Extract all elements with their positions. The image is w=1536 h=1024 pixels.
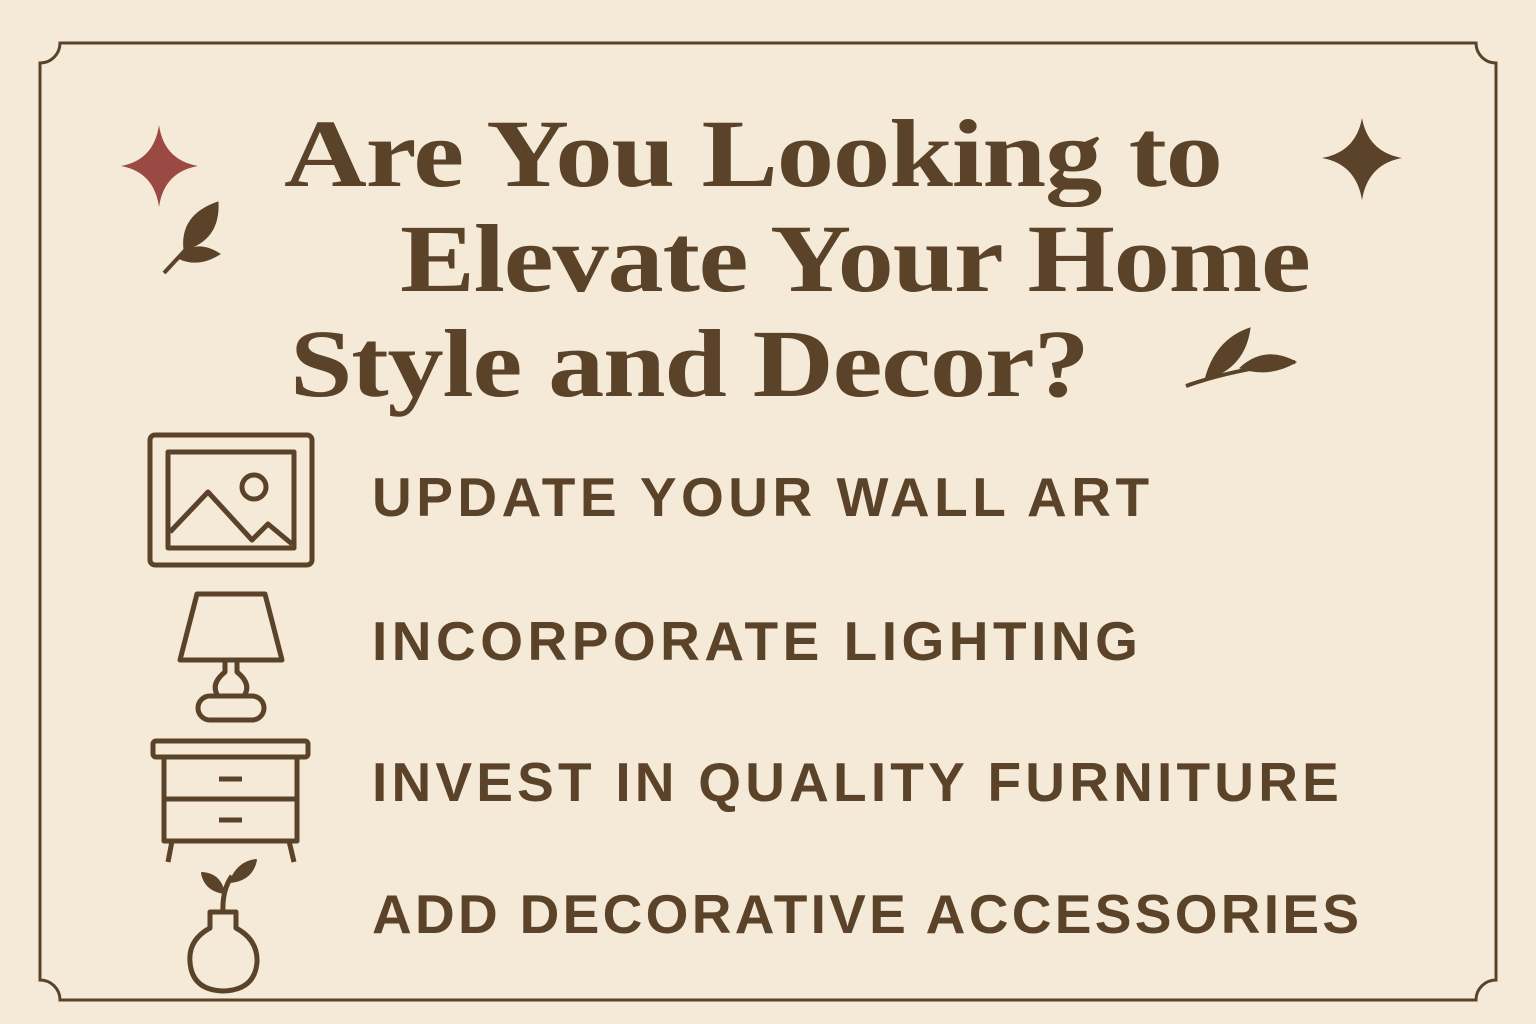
list item 2: INCORPORATE LIGHTING	[372, 610, 1142, 672]
list item 1: UPDATE YOUR WALL ART	[372, 466, 1154, 528]
list item 4: ADD DECORATIVE ACCESSORIES	[372, 883, 1362, 945]
title: Elevate Your Home	[400, 205, 1310, 312]
list item 3: INVEST IN QUALITY FURNITURE	[372, 751, 1343, 813]
title: Style and Decor?	[290, 310, 1089, 417]
title	[284, 100, 1310, 417]
title: Are You Looking to	[284, 100, 1222, 207]
